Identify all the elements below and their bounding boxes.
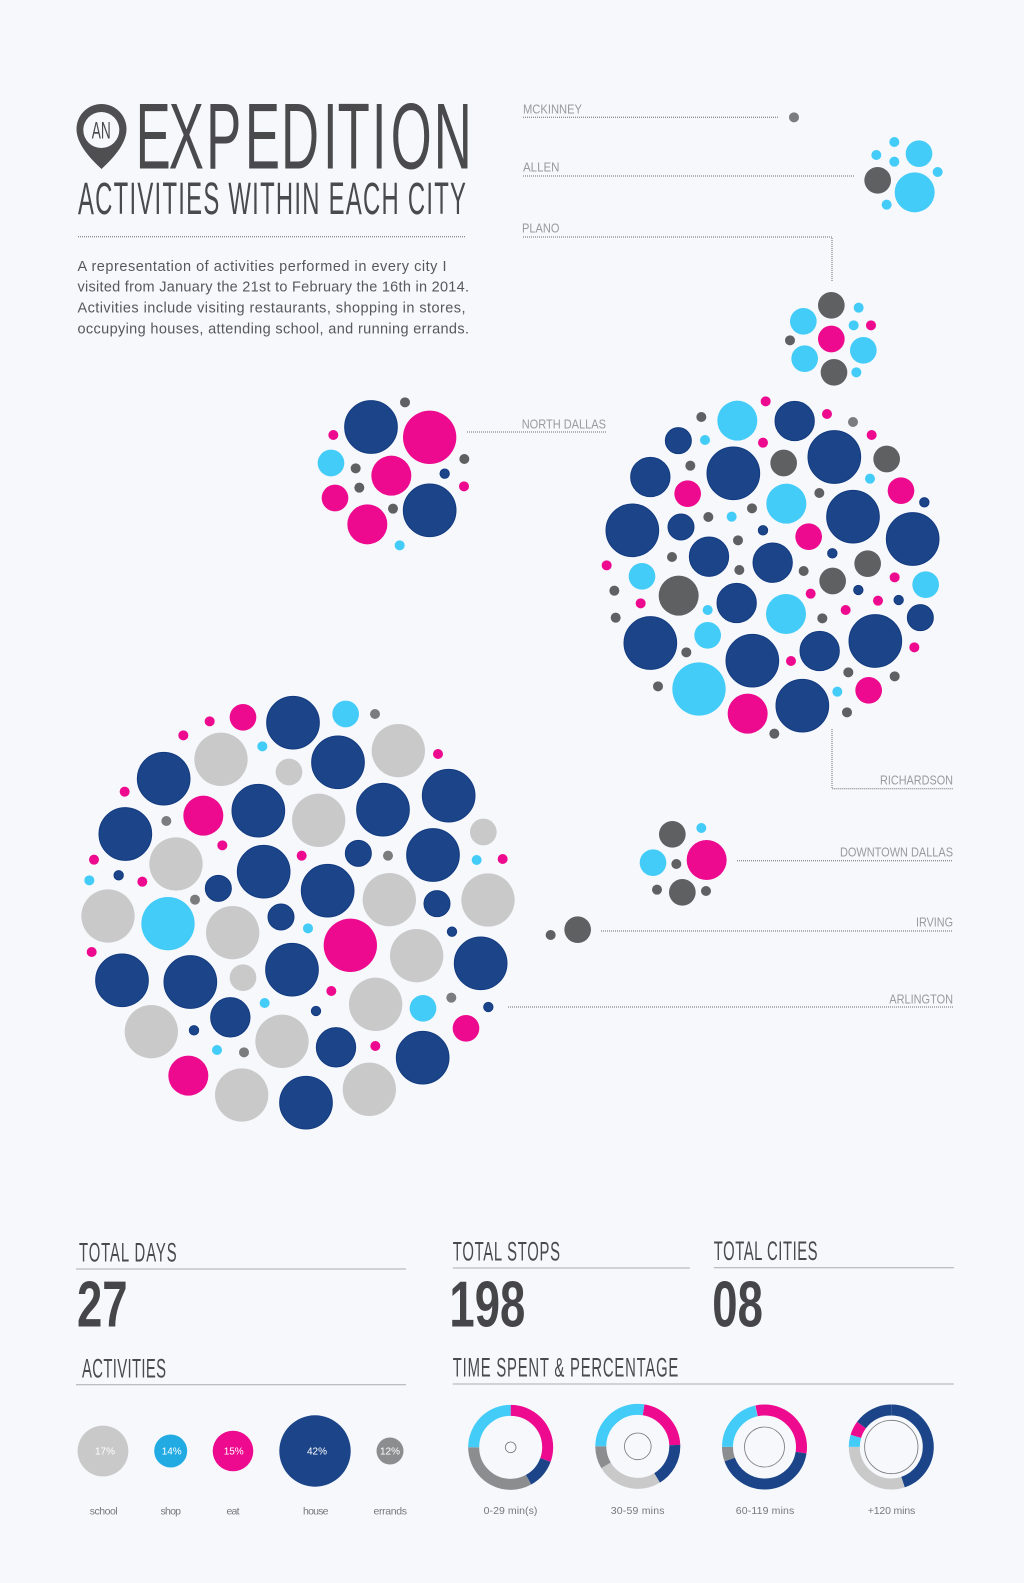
legend: shop: 14% (162, 1447, 182, 1458)
stat: total stops (449, 1236, 690, 1340)
cluster: Irving (546, 916, 591, 943)
callout: McKinney: MCKINNEY (523, 102, 583, 116)
icon: map pin with AN (76, 104, 126, 169)
legend: house (279, 1415, 351, 1518)
donut: +120 mins (854, 1410, 928, 1517)
cluster: McKinney (789, 112, 799, 122)
donut: 30-59 mins: 30-59 mins (611, 1505, 664, 1517)
legend: house: house (303, 1506, 329, 1518)
donut: 0-29 mins (474, 1410, 548, 1517)
legend: school (78, 1426, 128, 1518)
stat: total days (76, 1237, 406, 1340)
legend: errands: 12% (380, 1447, 400, 1458)
donut: 0-29 mins: 0-29 min(s) (484, 1505, 537, 1517)
cluster: North Dallas (318, 397, 469, 550)
donut: 30-59 mins (601, 1409, 675, 1517)
legend: school: 17% (95, 1447, 115, 1458)
intro text block: visited from January the 21st to February the 16th in 2014. (78, 280, 469, 296)
callout: Arlington: ARLINGTON (889, 992, 953, 1006)
legend: errands: errands (374, 1506, 407, 1518)
stat: total cities: 08 (712, 1267, 763, 1340)
cluster: Arlington (81, 696, 515, 1129)
donut: 60-119 mins (727, 1410, 801, 1517)
callout: Downtown Dallas: DOWNTOWN DALLAS (840, 846, 953, 860)
stat: total cities: TOTAL CITIES (714, 1235, 818, 1266)
heading: time spent and percentage: TIME SPENT & PERCENTAGE (453, 1352, 678, 1383)
legend: shop: shop (160, 1506, 181, 1518)
callout: Richardson: RICHARDSON (880, 774, 953, 788)
callout: North Dallas (467, 417, 606, 432)
legend: house: 42% (307, 1447, 327, 1458)
callout: North Dallas: NORTH DALLAS (522, 417, 606, 431)
title: EXPEDITION (136, 85, 472, 190)
intro text block: occupying houses, attending school, and running errands. (78, 322, 469, 338)
icon: map pin with AN: AN (92, 117, 111, 144)
legend: eat: eat (226, 1506, 240, 1518)
cluster: Plano (785, 292, 877, 386)
callout: Richardson (832, 729, 953, 789)
callout: Plano: PLANO (522, 222, 560, 236)
cluster: Downtown Dallas (640, 821, 727, 906)
legend: shop (154, 1434, 187, 1518)
callout: Allen: ALLEN (523, 161, 560, 175)
legend: eat (213, 1431, 253, 1518)
legend: school: school (90, 1506, 118, 1518)
donut: 60-119 mins: 60-119 mins (736, 1505, 794, 1517)
donut: +120 mins: +120 mins (868, 1505, 915, 1517)
intro text block (78, 259, 469, 338)
legend: eat: 15% (224, 1447, 244, 1458)
callout: Irving: IRVING (916, 916, 953, 930)
heading: activities: ACTIVITIES (82, 1353, 166, 1384)
intro text block: A representation of activities performed in every city I (78, 259, 446, 275)
cluster: Allen (864, 137, 943, 212)
subtitle: ACTIVITIES WITHIN EACH CITY (78, 173, 466, 224)
stat: total days: TOTAL DAYS (79, 1237, 177, 1268)
stat: total days: 27 (77, 1267, 128, 1340)
stat: total cities (712, 1235, 954, 1340)
cluster: Richardson (602, 396, 939, 739)
stat: total stops: 198 (449, 1267, 525, 1340)
stat: total stops: TOTAL STOPS (453, 1236, 560, 1267)
intro text block: Activities include visiting restaurants, shopping in stores, (78, 301, 466, 317)
callout: Plano (522, 222, 832, 282)
legend: errands (374, 1438, 407, 1518)
